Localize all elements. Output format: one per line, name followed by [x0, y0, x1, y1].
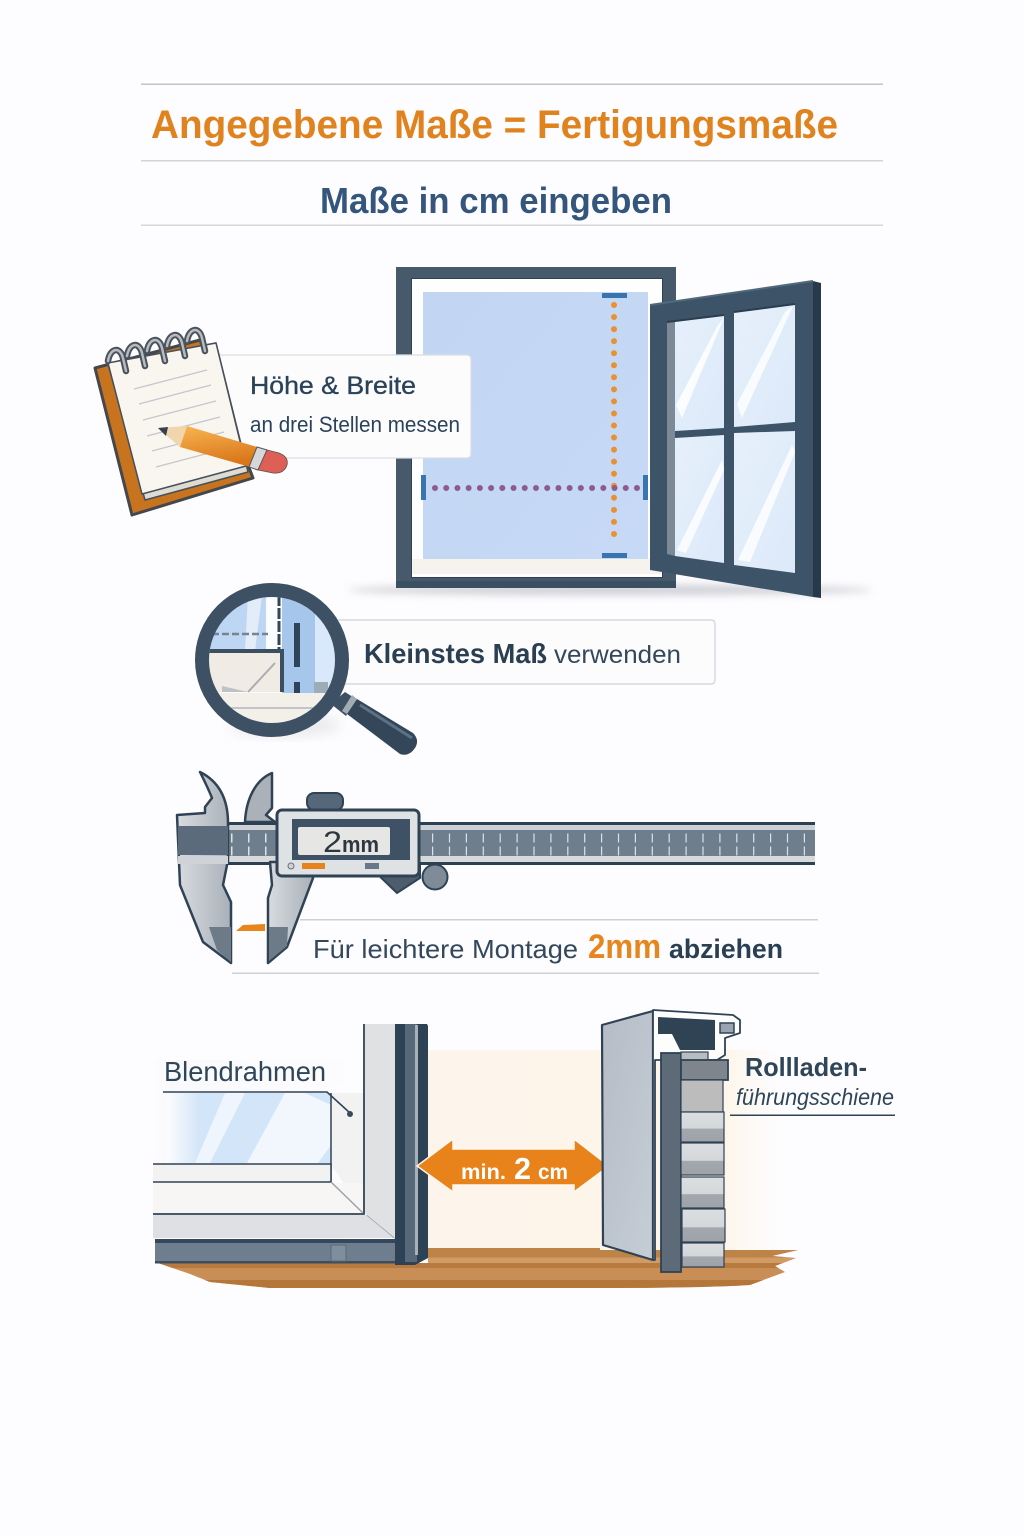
- rail plate: [602, 1011, 653, 1260]
- callout: Kleinstes Maß: verwenden: [554, 641, 681, 669]
- right lower jaw: [268, 862, 313, 963]
- icon: magnifying glass: [202, 590, 417, 755]
- rail profile top: [653, 1010, 740, 1260]
- notebook pages: [108, 343, 248, 500]
- notebook lines: [134, 370, 228, 467]
- arrow: minimum 2 cm clearance: min.: [461, 1161, 506, 1184]
- lens contents: [209, 597, 335, 723]
- caliper caption: Für leichtere Montage: [313, 934, 578, 964]
- shutter slats: [681, 1052, 728, 1267]
- arrow: minimum 2 cm clearance: cm: [538, 1161, 568, 1184]
- spiral rings: [108, 330, 205, 371]
- fixed window frame: [396, 267, 676, 588]
- height measurement line: [602, 293, 627, 558]
- callout heading: Höhe & Breite: [250, 372, 416, 400]
- dark frame column: [395, 1024, 428, 1265]
- label: Rollladenführungsschiene: [730, 1052, 895, 1116]
- wall background: [428, 1050, 778, 1250]
- arrow: minimum 2 cm clearance: [417, 1139, 609, 1192]
- width measurement line: [421, 475, 648, 500]
- light frame column: [365, 1024, 395, 1238]
- title: Angegebene Maße = Fertigungsmaße: [151, 103, 838, 147]
- glass pane: [167, 1093, 331, 1163]
- subtitle: Maße in cm eingeben: [320, 180, 672, 221]
- caliper text strip: abziehen: [669, 934, 783, 964]
- label: Blendrahmen: [163, 1056, 353, 1117]
- illustration: digital caliper: [177, 772, 815, 963]
- icon: notebook and pencil: [95, 330, 287, 515]
- label: Rollladenführungsschiene: führungsschiene: [736, 1084, 894, 1110]
- left outer jaw: [177, 772, 231, 963]
- display value: 2: [323, 826, 342, 859]
- glass area: [423, 292, 648, 559]
- arrow: minimum 2 cm clearance: 2: [514, 1151, 531, 1186]
- slider housing: [277, 793, 448, 893]
- window sill profiles: [153, 1164, 331, 1182]
- handle: [331, 692, 417, 755]
- right upper jaw: [245, 773, 275, 822]
- caliper text strip: 2mm: [588, 928, 661, 966]
- display: [292, 819, 410, 860]
- gap marker: [236, 924, 265, 931]
- caliper beam: [225, 822, 815, 865]
- pencil: [158, 426, 287, 473]
- dark frame bar: [155, 1239, 395, 1263]
- illustration: window with measuring lines: [348, 267, 872, 598]
- rail channel: [661, 1053, 681, 1272]
- lens ring: [202, 590, 342, 730]
- callout: Kleinstes Maß: [320, 620, 715, 684]
- label: Blendrahmen: Blendrahmen: [164, 1056, 326, 1087]
- caliper text strip: [232, 919, 819, 974]
- callout: Höhe und Breite: [200, 355, 471, 458]
- slider housing: mm: [342, 832, 379, 857]
- roller shutter guide rail: [602, 1010, 740, 1272]
- header block: [141, 84, 883, 226]
- indicators: [288, 863, 294, 869]
- label: Rollladenführungsschiene: Rollladen-: [745, 1052, 867, 1082]
- illustration: mounting clearance: [150, 1010, 895, 1290]
- notebook cover: [95, 340, 253, 515]
- open window sash: [650, 281, 821, 598]
- window shadow: [348, 585, 872, 595]
- callout text: Kleinstes Maß: [364, 638, 547, 669]
- callout text: an drei Stellen messen: [250, 412, 460, 437]
- floor: [160, 1248, 798, 1288]
- window frame section: [153, 1024, 428, 1265]
